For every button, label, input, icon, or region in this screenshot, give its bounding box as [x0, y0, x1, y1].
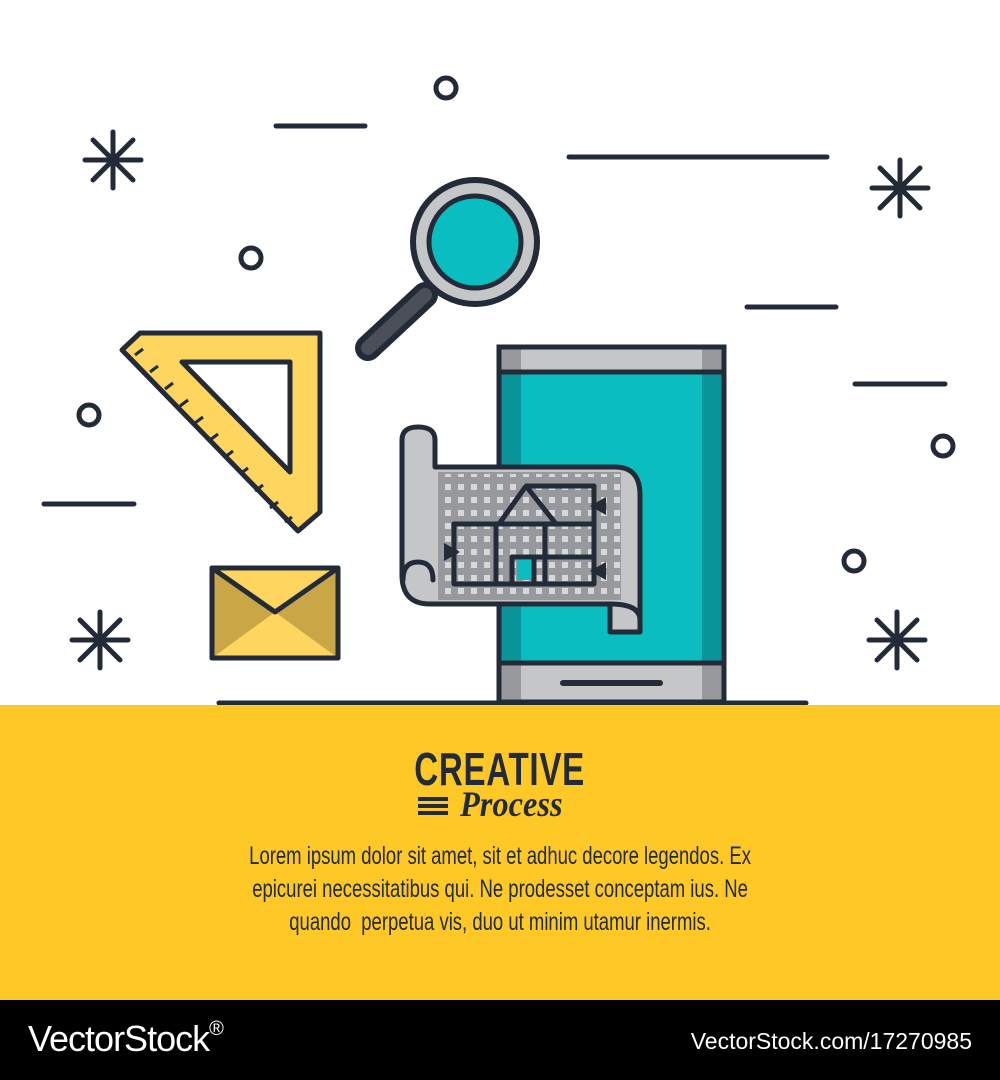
- icon: smartphone: [499, 347, 724, 702]
- icon: asterisks: [72, 132, 928, 668]
- body text: quando perpetua vis, duo ut minim utamur inermis.: [289, 908, 711, 936]
- footer: [0, 1000, 1000, 1080]
- icon: menu lines: [418, 797, 448, 815]
- subheading: Process: Process: [460, 784, 563, 824]
- icon: triangle ruler: [122, 333, 320, 531]
- icon: magnifier: [368, 180, 537, 348]
- heading: CREATIVE: CREATIVE: [415, 743, 585, 795]
- yellow text panel: [0, 705, 1000, 1000]
- body text: [249, 842, 751, 936]
- body text: Lorem ipsum dolor sit amet, sit et adhuc decore legendos. Ex: [249, 842, 751, 870]
- footer: VectorStock®: [28, 1018, 223, 1059]
- illustration: [42, 76, 956, 705]
- icon: envelope: [212, 568, 338, 658]
- footer: VectorStock.com/17270985: [691, 1028, 972, 1054]
- icon: blueprint: [402, 427, 640, 632]
- body text: epicurei necessitatibus qui. Ne prodesset conceptam ius. Ne: [252, 875, 748, 903]
